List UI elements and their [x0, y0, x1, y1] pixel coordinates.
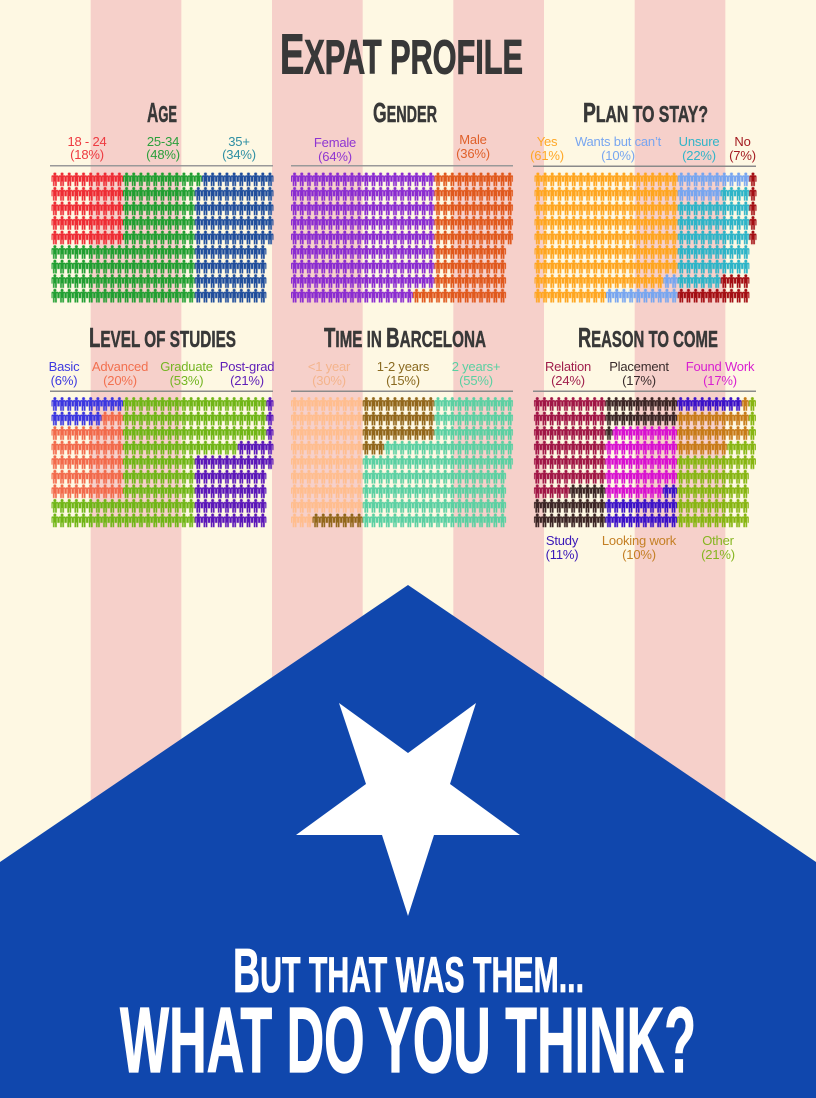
- closing line: but that was them: BUT THAT WAS THEM...: [233, 937, 584, 1006]
- panel: gender: [291, 97, 513, 303]
- segment: less than 1 year: [291, 397, 363, 528]
- panel: age: [50, 97, 274, 303]
- segment: no: [678, 172, 757, 303]
- legend: plan to stay: Unsure: [679, 134, 719, 149]
- legend: reasons, bottom: Other: [702, 533, 735, 548]
- segment: found work: [605, 426, 677, 499]
- legend: level of studies: (21%): [230, 373, 264, 388]
- legend: reasons, top: [545, 359, 755, 388]
- legend: age groups: (34%): [222, 147, 256, 162]
- legend: age groups: [67, 134, 256, 162]
- legend: level of studies: Basic: [49, 359, 80, 374]
- legend: reasons, top: (17%): [703, 373, 737, 388]
- legend: level of studies: Advanced: [92, 359, 148, 374]
- legend: age groups: 18 - 24: [67, 134, 107, 149]
- legend: reasons, bottom: Looking work: [602, 533, 677, 548]
- legend: plan to stay: [530, 134, 756, 163]
- pictogram grid: reason to come: [534, 397, 756, 528]
- panel: reason to come: [533, 322, 756, 562]
- legend: gender: [314, 132, 490, 164]
- pictogram grid: level of studies: [51, 397, 274, 528]
- icon: white star: [296, 703, 520, 916]
- segment: 25-34: [51, 172, 202, 303]
- segment: looking work: [677, 397, 749, 455]
- legend: reasons, top: (24%): [551, 373, 585, 388]
- heading: level of studies: LEVEL OF STUDIES: [89, 322, 236, 353]
- pictogram grid: age: [51, 172, 274, 303]
- legend: level of studies: Post-grad: [220, 359, 274, 374]
- legend: age groups: 25-34: [147, 134, 179, 149]
- segment: 2 years plus: [363, 397, 513, 528]
- legend: reasons, bottom: (21%): [701, 547, 735, 562]
- legend: reasons, top: Placement: [609, 359, 669, 374]
- legend: reasons, top: Relation: [545, 359, 591, 374]
- segment: wants but can't: [606, 172, 749, 303]
- legend: level of studies: Graduate: [160, 359, 213, 374]
- segment: post-grad: [195, 397, 274, 528]
- segment: study: [605, 397, 742, 528]
- panel: plan to stay: [530, 97, 757, 303]
- segment: female: [291, 172, 434, 303]
- segment: 35+: [195, 172, 274, 303]
- legend: time in Barcelona: [308, 359, 500, 388]
- segment: placement: [534, 397, 677, 528]
- pictogram grid: gender: [291, 172, 513, 303]
- legend: gender: (36%): [456, 146, 490, 161]
- heading: plan to stay: PLAN TO STAY?: [583, 97, 708, 128]
- panel: time in Barcelona: [291, 322, 513, 528]
- segment: relation: [534, 397, 605, 499]
- legend: age groups: (18%): [70, 147, 104, 162]
- legend: reasons, bottom: (10%): [622, 547, 656, 562]
- legend: reasons, bottom: (11%): [546, 547, 578, 562]
- legend: reasons, bottom: Study: [546, 533, 579, 548]
- panel: level of studies: [49, 322, 274, 528]
- legend: plan to stay: No: [734, 134, 751, 149]
- legend: time in Barcelona: (55%): [459, 373, 493, 388]
- legend: level of studies: (53%): [170, 373, 203, 388]
- pictogram grid: time in Barcelona: [291, 397, 513, 528]
- legend: plan to stay: (7%): [729, 148, 756, 163]
- legend: level of studies: (6%): [51, 373, 77, 388]
- legend: time in Barcelona: <1 year: [308, 359, 351, 374]
- legend: reasons, bottom: [546, 533, 735, 562]
- blue banner shape: [0, 585, 816, 1098]
- legend: gender: Male: [459, 132, 487, 147]
- segment: yes: [534, 172, 678, 303]
- legend: reasons, top: Found Work: [686, 359, 755, 374]
- heading: reason to come: REASON TO COME: [578, 322, 718, 353]
- legend: time in Barcelona: 2 years+: [452, 359, 500, 374]
- legend: gender: (64%): [318, 149, 352, 164]
- legend: level of studies: (20%): [103, 373, 137, 388]
- legend: time in Barcelona: (15%): [386, 373, 420, 388]
- legend: plan to stay: (10%): [601, 148, 635, 163]
- legend: time in Barcelona: (30%): [312, 373, 346, 388]
- legend: plan to stay: Yes: [537, 134, 558, 149]
- legend: time in Barcelona: 1-2 years: [377, 359, 430, 374]
- legend: plan to stay: Wants but can’t: [575, 134, 662, 149]
- segment: 18-24: [51, 172, 123, 245]
- heading: gender: GENDER: [373, 97, 437, 128]
- segment: male: [413, 172, 513, 303]
- segment: graduate: [51, 397, 266, 528]
- segment: unsure: [678, 187, 749, 289]
- title: EXPAT PROFILE: [280, 22, 523, 86]
- segment: 1-2 years: [313, 397, 434, 528]
- legend: level of studies: [49, 359, 274, 388]
- segment: advanced: [51, 412, 123, 499]
- legend: plan to stay: (22%): [682, 148, 716, 163]
- legend: plan to stay: (61%): [530, 148, 564, 163]
- legend: age groups: (48%): [146, 147, 180, 162]
- segment: basic: [51, 397, 123, 426]
- heading: time in Barcelona: TIME IN BARCELONA: [324, 322, 486, 353]
- heading: age: AGE: [147, 97, 177, 128]
- legend: reasons, top: (17%): [622, 373, 656, 388]
- segment: other: [677, 397, 756, 528]
- legend: gender: Female: [314, 135, 356, 150]
- pictogram grid: plan to stay: [534, 172, 757, 303]
- legend: age groups: 35+: [228, 134, 250, 149]
